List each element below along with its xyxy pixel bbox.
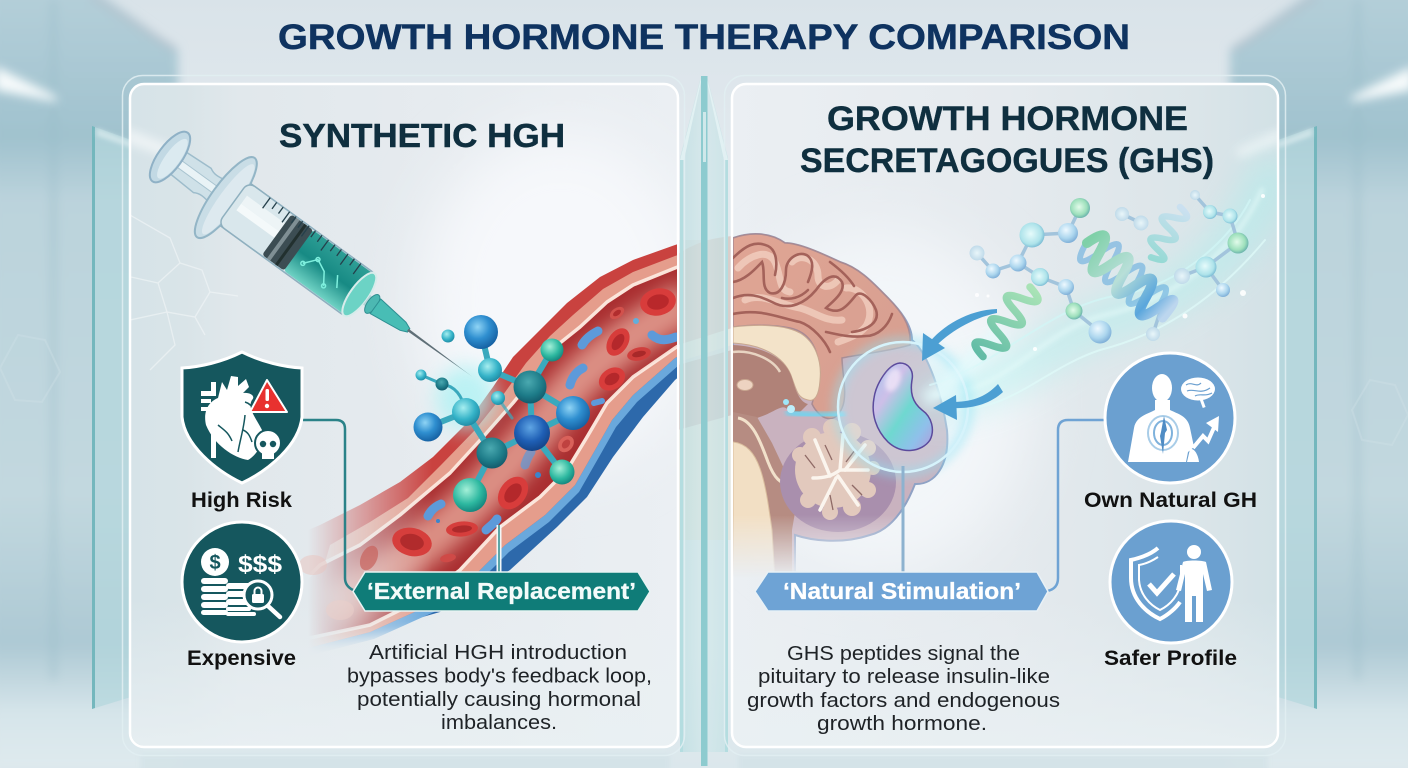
label: high risk: High Risk [191, 489, 292, 512]
text block: synthetic description: bypasses body's feedback loop, [347, 664, 652, 688]
icon: safer profile [1110, 521, 1232, 643]
label: own natural GH: Own Natural GH [1084, 489, 1257, 512]
light stream from peptides [930, 180, 1270, 410]
icon: own natural GH [1105, 353, 1235, 483]
heading: synthetic HGH: SYNTHETIC HGH [279, 117, 565, 154]
connector: own natural GH to label [1047, 420, 1106, 591]
callout: external replacement [353, 572, 650, 611]
heading: growth hormone secretagogues: GROWTH HORMONE [827, 100, 1188, 138]
pituitary gland highlight [783, 330, 1000, 473]
faded artwork behind centre glass [678, 236, 732, 540]
blood vessel illustration [313, 244, 677, 646]
text block: GHS description: GHS peptides signal the [787, 642, 1020, 665]
text block: GHS description: pituitary to release insulin-like [758, 665, 1050, 688]
peptide chains [970, 190, 1248, 364]
label: safer profile: Safer Profile [1104, 647, 1237, 670]
text block: synthetic description: potentially causing hormonal [357, 688, 641, 711]
text block: GHS description [747, 642, 1060, 735]
connector: pituitary to label [902, 466, 904, 574]
heading: growth hormone secretagogues: SECRETAGOGUES (GHS) [800, 142, 1214, 180]
text block: GHS description: growth factors and endogenous [747, 689, 1060, 712]
callout: natural stimulation [755, 572, 1048, 611]
callout: natural stimulation: ‘Natural Stimulation’ [783, 578, 1021, 604]
icon: expensive coins: $$$ [238, 551, 283, 578]
icon: expensive coins: $ [209, 552, 221, 574]
right glass pane [1278, 126, 1317, 709]
heading: growth hormone secretagogues [800, 100, 1214, 180]
hormone molecule [414, 315, 590, 512]
red blood cells and platelets [299, 285, 678, 620]
centre glass divider [680, 76, 728, 766]
text block: synthetic description: Artificial HGH introduction [369, 641, 627, 664]
label: expensive: Expensive [187, 647, 296, 670]
panel: growth hormone secretagogues [724, 76, 1286, 756]
text block: synthetic description: imbalances. [441, 711, 557, 734]
brain illustration [733, 234, 947, 580]
icon: expensive coins [182, 522, 302, 642]
title: GROWTH HORMONE THERAPY COMPARISON [278, 18, 1130, 57]
callout: external replacement: ‘External Replacement’ [367, 578, 636, 604]
icon: high risk shield [182, 352, 302, 483]
panel: synthetic HGH [122, 76, 700, 756]
left glass pane [92, 126, 132, 709]
text block: GHS description: growth hormone. [817, 712, 987, 735]
syringe [131, 110, 501, 416]
arrows into pituitary [922, 309, 1003, 420]
text block: synthetic description [347, 641, 652, 734]
connector: vessel to label [496, 525, 502, 574]
connector: high risk to label [303, 420, 353, 590]
